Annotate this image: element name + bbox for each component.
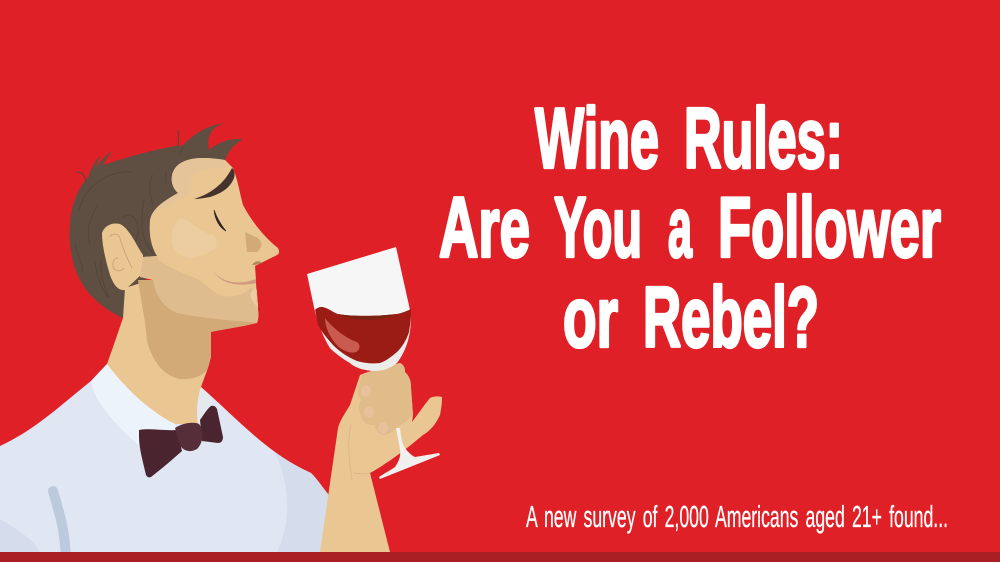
stem [379, 428, 440, 479]
title: Rebel? [643, 270, 819, 366]
hair strands [75, 130, 183, 298]
fingernails [361, 385, 371, 397]
chin highlight [250, 288, 258, 307]
title [439, 92, 941, 366]
wine glass [307, 247, 440, 479]
eyebrow [194, 168, 235, 199]
jaw shading [140, 256, 258, 323]
bow tie [139, 406, 223, 477]
lips [213, 270, 256, 285]
neck [107, 280, 211, 424]
cheek highlight [172, 218, 217, 258]
nose shadow [245, 232, 261, 252]
wine [315, 307, 411, 363]
face [140, 158, 279, 323]
bottom band [0, 552, 1000, 562]
hair [70, 123, 243, 318]
hand [320, 363, 442, 552]
shirt [0, 364, 340, 560]
title: Are [439, 180, 530, 276]
forehead highlight [152, 158, 229, 215]
neck shadow [138, 280, 257, 379]
collar right [197, 387, 212, 424]
title: a [668, 180, 692, 276]
wine highlight [325, 318, 360, 353]
hair spikes [88, 151, 112, 178]
closed eye [214, 210, 226, 231]
title: or [563, 270, 618, 366]
fingers [358, 363, 413, 435]
title: Wine [535, 92, 659, 186]
nostril [252, 261, 262, 265]
ear [102, 223, 143, 290]
illustration: man tasting wine [0, 123, 442, 560]
title: You [554, 180, 642, 276]
title: Rules: [684, 92, 843, 186]
palm crease [349, 425, 370, 480]
collar [91, 364, 180, 446]
